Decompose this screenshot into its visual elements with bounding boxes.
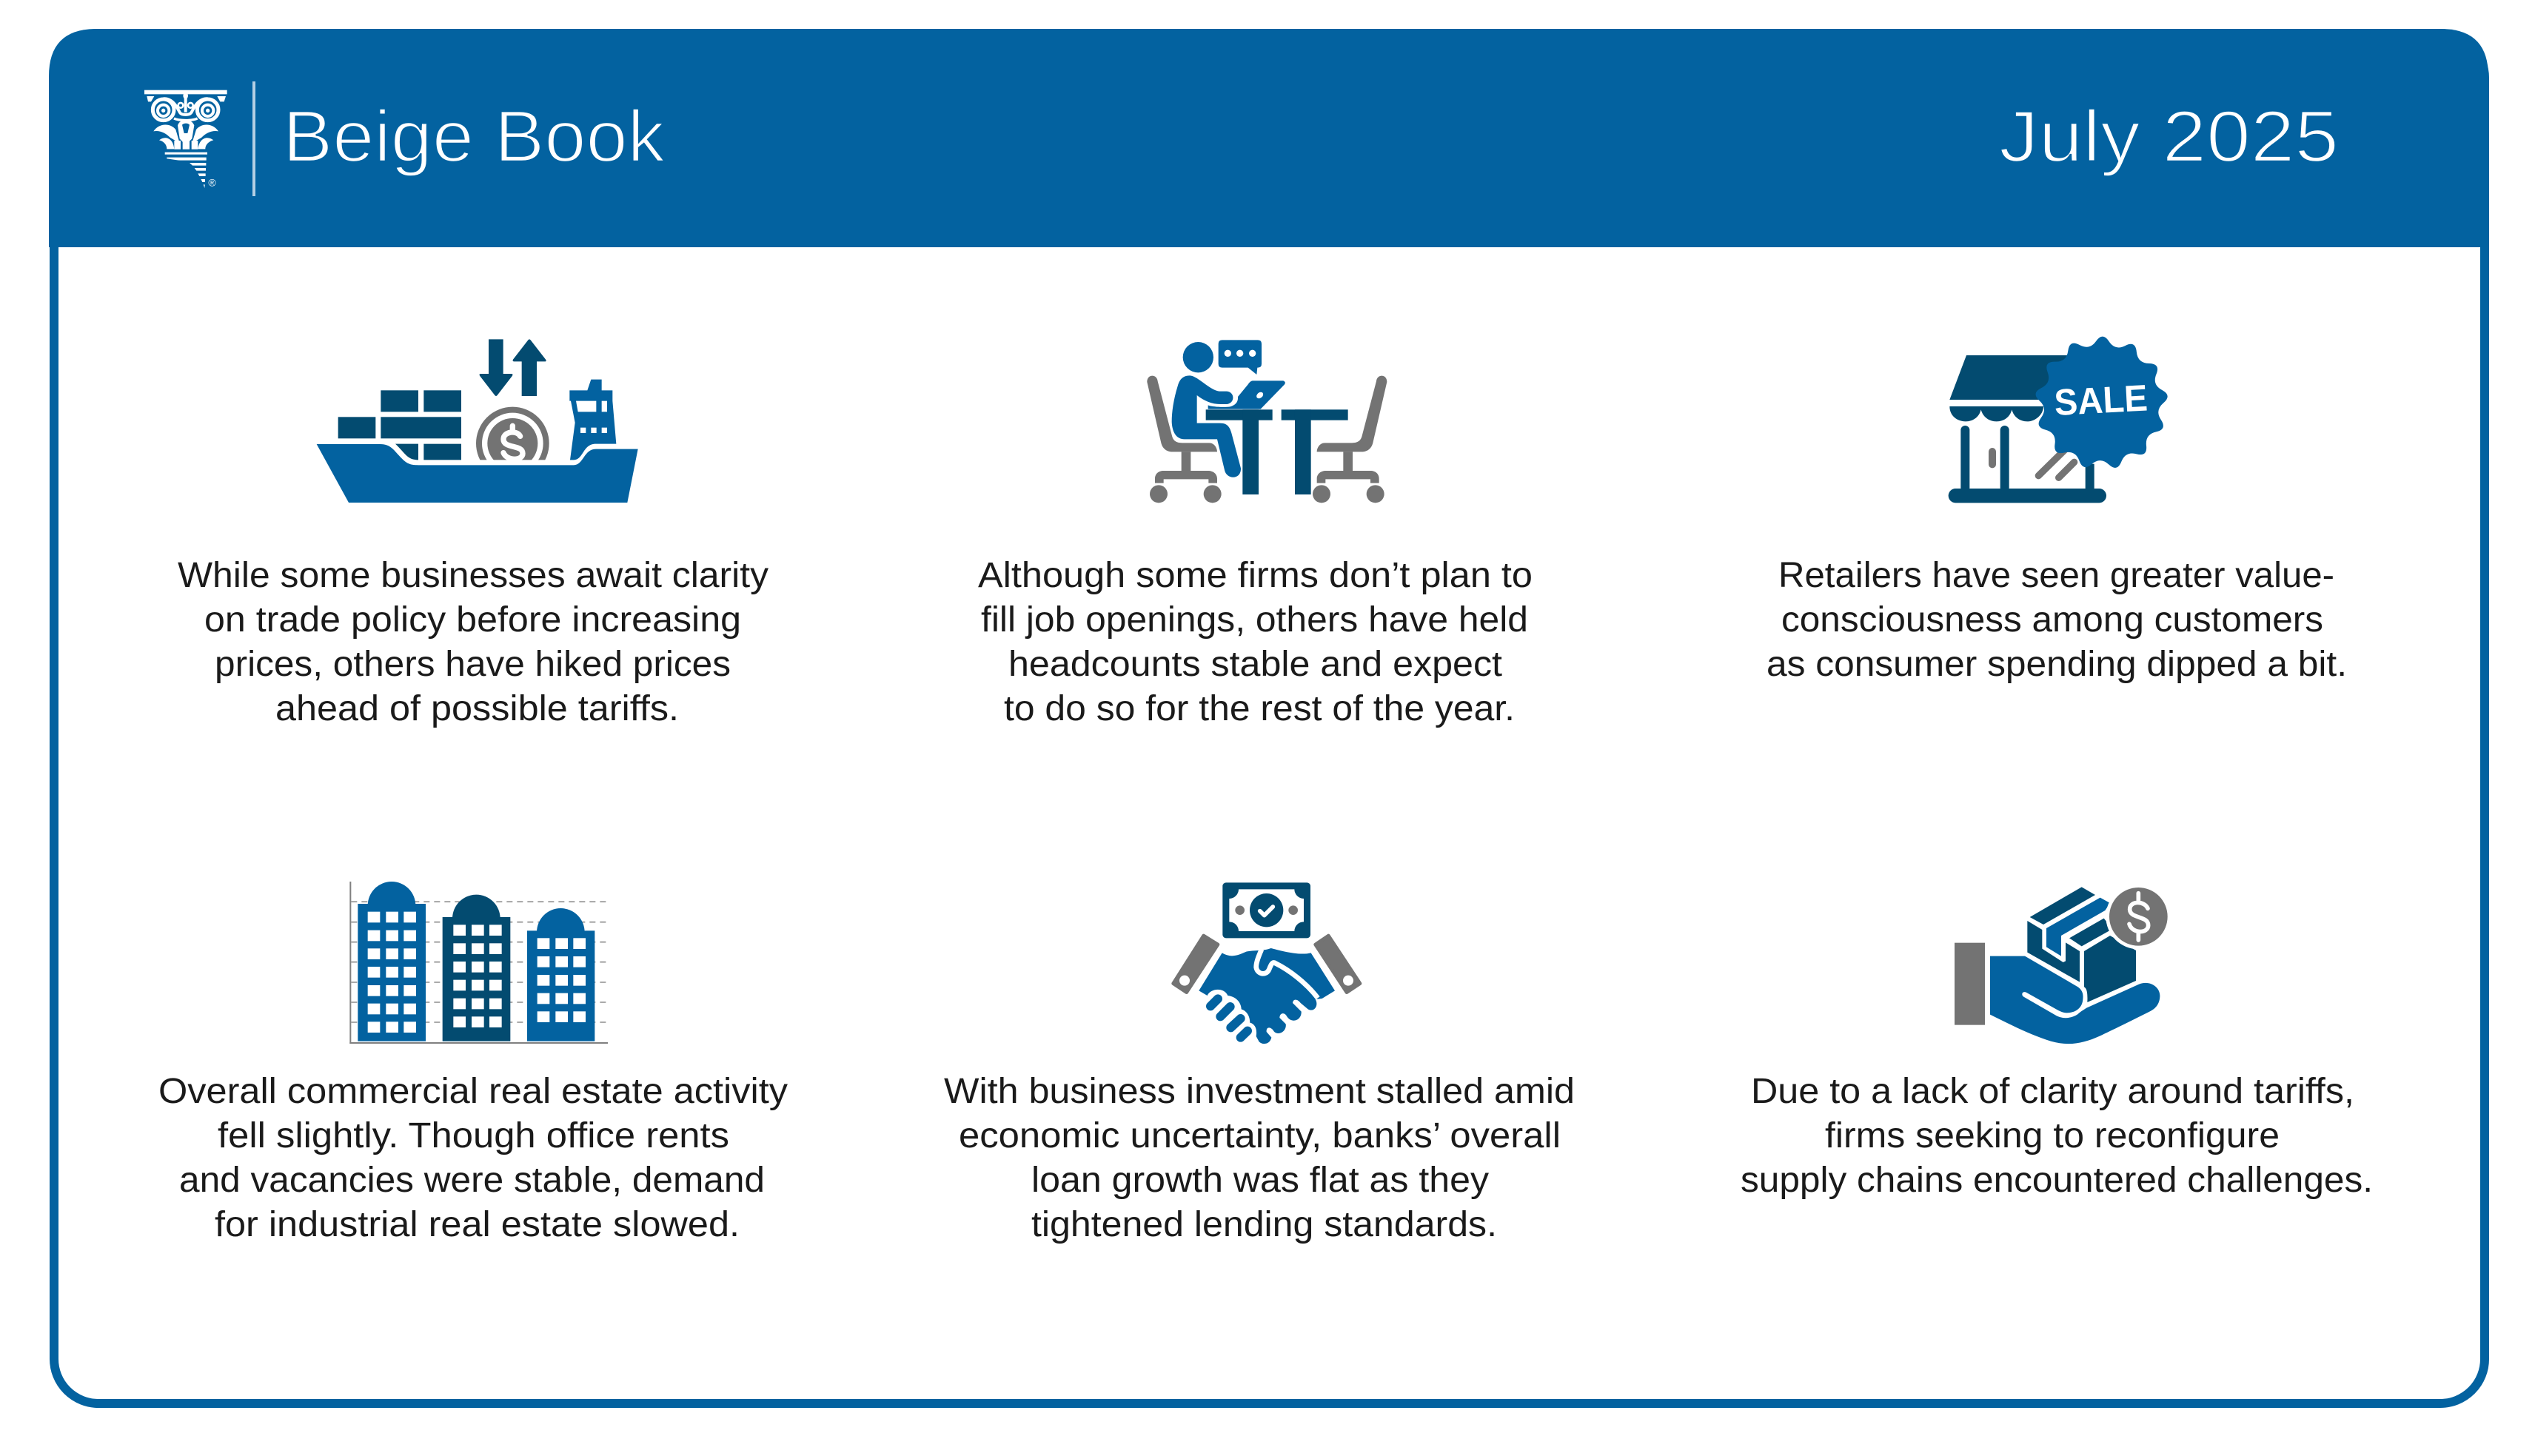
text: commercial real estate: for industrial real estate slowed. bbox=[215, 1205, 740, 1244]
icon: buildings on a chart bbox=[349, 882, 608, 1044]
text: trade: ahead of possible tariffs. bbox=[275, 689, 679, 728]
icon: storefront with sale badge bbox=[1949, 337, 2168, 503]
text: banking bbox=[944, 1072, 1575, 1244]
text: employment: to do so for the rest of the year. bbox=[1004, 689, 1515, 728]
icon: hand holding box with dollar coin bbox=[1955, 884, 2171, 1044]
text: retail: consciousness among customers bbox=[1781, 600, 2323, 640]
text: commercial real estate: Overall commercial real estate activity bbox=[158, 1072, 788, 1111]
text: employment: headcounts stable and expect bbox=[1008, 645, 1502, 684]
text: employment: Although some firms don’t plan to bbox=[978, 556, 1533, 595]
text: banking: economic uncertainty, banks’ overall bbox=[959, 1116, 1561, 1155]
text: supply chains: firms seeking to reconfigure bbox=[1825, 1116, 2280, 1155]
text: commercial real estate: and vacancies were stable, demand bbox=[179, 1161, 765, 1200]
text: commercial real estate bbox=[158, 1072, 788, 1244]
text: banking: With business investment stalled amid bbox=[944, 1072, 1575, 1111]
text: banking: tightened lending standards. bbox=[1031, 1205, 1497, 1244]
text: employment: fill job openings, others have held bbox=[981, 600, 1528, 640]
header band bbox=[49, 29, 2488, 247]
text: trade bbox=[178, 556, 768, 728]
text: employment bbox=[978, 556, 1533, 728]
sale badge: SALE bbox=[2053, 377, 2149, 423]
title: Beige Book bbox=[283, 95, 666, 177]
text: trade: prices, others have hiked prices bbox=[215, 645, 731, 684]
icon: cargo ship with arrows and coin bbox=[317, 339, 638, 503]
text: commercial real estate: fell slightly. Though office rents bbox=[218, 1116, 729, 1155]
icon: office worker at desk with laptop bbox=[1147, 340, 1387, 503]
text: trade: on trade policy before increasing bbox=[204, 600, 741, 640]
text: supply chains: Due to a lack of clarity around tariffs, bbox=[1751, 1072, 2354, 1111]
logo: Corinthian column capital bbox=[144, 90, 227, 188]
sale badge bbox=[2036, 337, 2168, 468]
text: retail bbox=[1767, 556, 2347, 684]
text: retail: Retailers have seen greater value- bbox=[1778, 556, 2334, 595]
text: supply chains bbox=[1741, 1072, 2373, 1200]
header divider bbox=[252, 81, 255, 196]
icon: handshake under banknote bbox=[1173, 882, 1360, 1044]
logo: Corinthian column capital: ® bbox=[208, 176, 216, 188]
text: supply chains: supply chains encountered challenges. bbox=[1741, 1161, 2373, 1200]
date: July 2025 bbox=[1999, 95, 2339, 177]
text: trade: While some businesses await clarity bbox=[178, 556, 768, 595]
text: banking: loan growth was flat as they bbox=[1031, 1161, 1489, 1200]
text: retail: as consumer spending dipped a bit. bbox=[1767, 645, 2347, 684]
